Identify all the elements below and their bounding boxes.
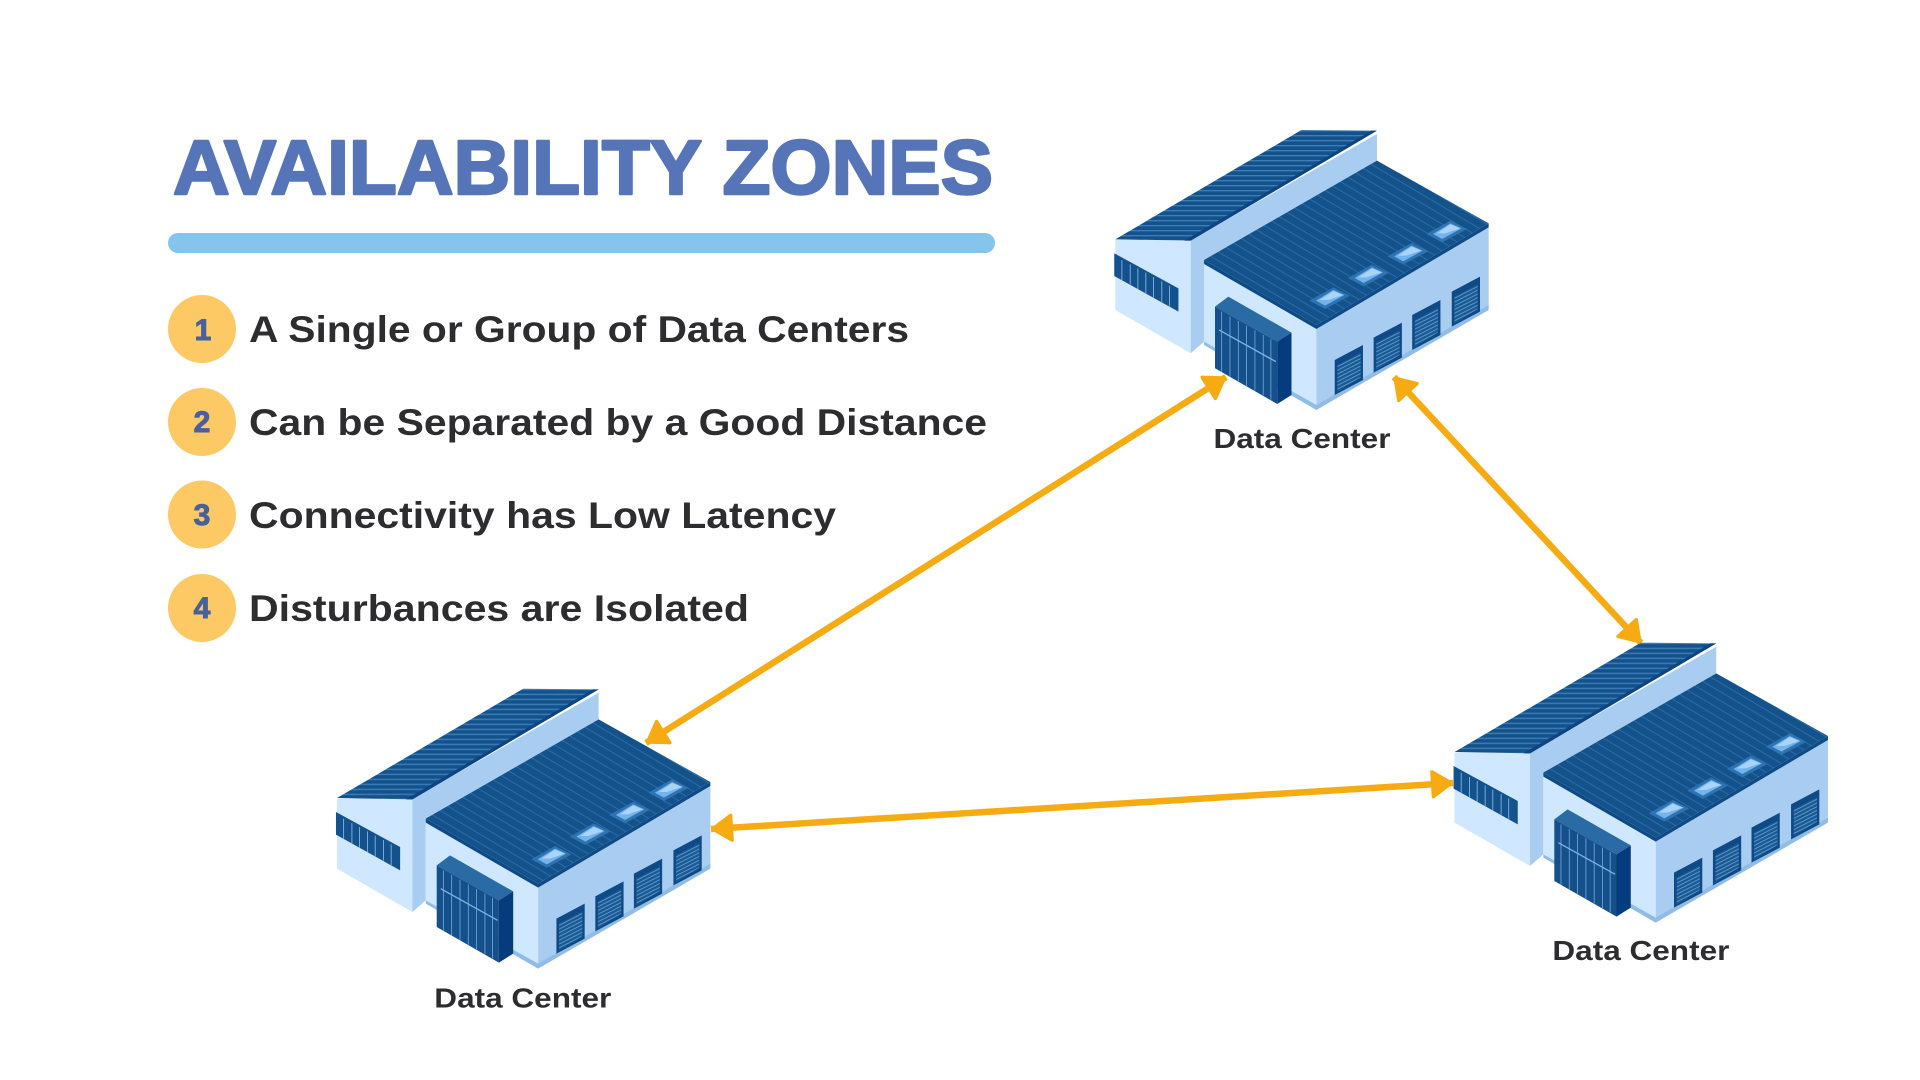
title: AVAILABILITY ZONES	[173, 125, 993, 211]
title underline	[168, 233, 995, 253]
list item 1: A Single or Group of Data Centers	[249, 309, 909, 350]
arrow: top to right data center	[1394, 377, 1641, 643]
building illustration	[1114, 130, 1489, 410]
list item 4: 4	[194, 592, 211, 625]
list item 2: Can be Separated by a Good Distance	[249, 402, 987, 443]
label: Data Center	[1214, 423, 1391, 454]
list item 3	[168, 480, 836, 548]
list item 1	[168, 295, 909, 363]
list item 2: 2	[194, 406, 210, 439]
data center: bottom left	[336, 689, 710, 1013]
list item 3: Connectivity has Low Latency	[249, 495, 836, 536]
data center: top	[1114, 130, 1489, 454]
label: Data Center	[1552, 935, 1730, 966]
building illustration	[336, 689, 710, 969]
list item 3: 3	[194, 499, 210, 532]
list item 2	[168, 388, 987, 456]
arrow: bottom-left to top data center	[646, 377, 1226, 743]
list item 4: Disturbances are Isolated	[249, 588, 749, 629]
list item 4	[168, 574, 749, 642]
building illustration	[1454, 643, 1828, 923]
data center: right	[1454, 643, 1828, 966]
list item 1: 1	[195, 314, 211, 347]
label: Data Center	[434, 982, 611, 1013]
arrow: bottom-left to right data center	[711, 783, 1453, 829]
list of features	[168, 295, 987, 642]
